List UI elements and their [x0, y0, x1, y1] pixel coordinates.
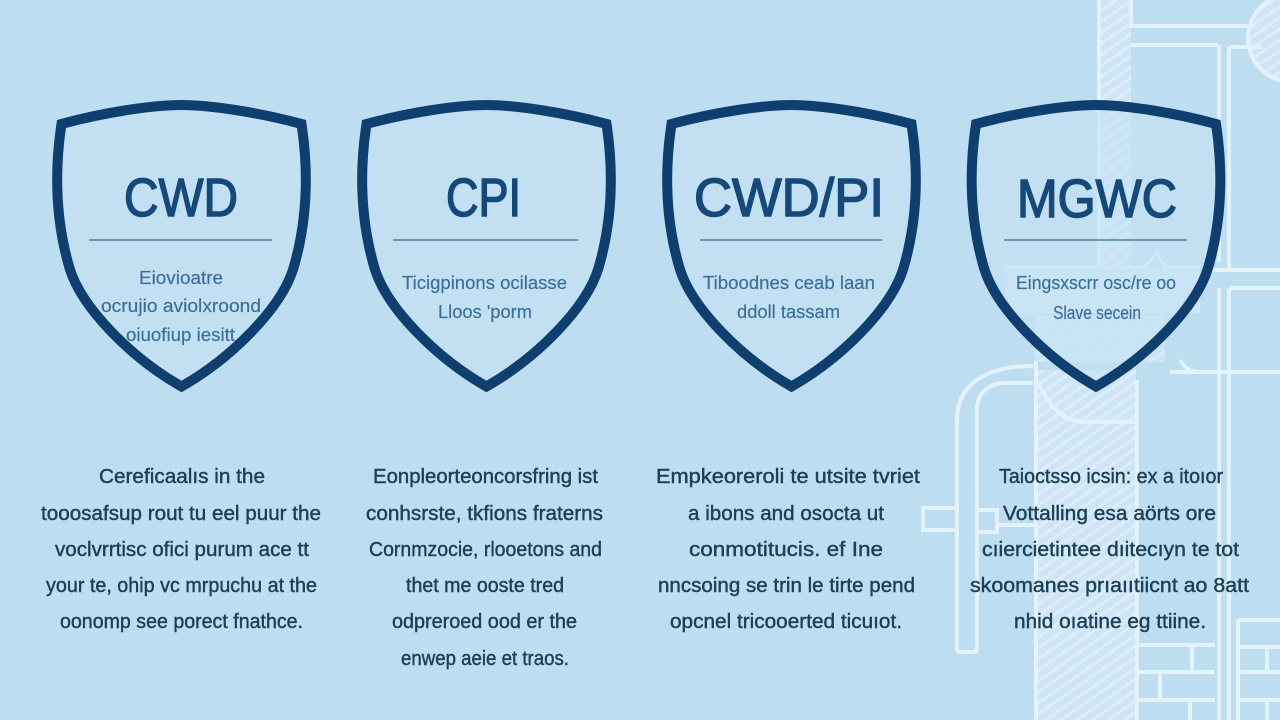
shield caption: CPI: Ticigpinons ocilasse — [402, 272, 567, 293]
shield: CWD/PI — [667, 105, 916, 386]
shield caption: CWD/PI: ddoll tassam — [737, 301, 840, 322]
blueprint pipe illustration — [923, 0, 1280, 720]
text block: column 4: cıiercietintee dıitecıyn te tot — [982, 539, 1239, 561]
text block: column 2: thet me ooste tred — [406, 575, 564, 597]
shield caption: CWD/PI — [703, 272, 875, 322]
shield caption: MGWC — [1016, 272, 1176, 323]
text block: column 3 — [656, 466, 920, 633]
shield: MGWC — [972, 105, 1220, 386]
text block: column 4: Vottalling esa aörts ore — [1003, 503, 1216, 525]
title: CWD/PI: CWD/PI — [694, 168, 884, 228]
text block: column 3: opcnel tricooerted ticuıot. — [670, 611, 902, 633]
title: MGWC: MGWC — [1017, 169, 1177, 229]
text block: column 1: oonomp see porect fnathce. — [60, 611, 303, 633]
text block: column 1: Cereficaalıs in the — [99, 466, 265, 488]
text block: column 3: Empkeoreroli te utsite tvriet — [656, 466, 920, 488]
shield caption: MGWC: Slave secein — [1053, 302, 1141, 323]
shield: CWD — [57, 105, 306, 386]
shield caption: MGWC: Eingsxscrr osc/re oo — [1016, 272, 1176, 293]
text block: column 3: a ibons and osocta ut — [688, 503, 884, 525]
shield caption: CWD — [101, 267, 261, 345]
text block: column 4 — [970, 466, 1249, 633]
text block: column 2: odpreroed ood er the — [392, 611, 577, 633]
text block: column 3: conmotitucis. ef Ine — [689, 539, 883, 561]
text block: column 2: Cornmzocie, rlooetons and — [369, 539, 602, 561]
title: CWD: CWD — [124, 168, 238, 228]
title: CPI: CPI — [446, 168, 521, 228]
text block: column 4: nhid oıatine eg ttiine. — [1014, 611, 1206, 633]
shield caption: CWD/PI: Tiboodnes ceab laan — [703, 272, 875, 293]
shield caption: CWD: ocrujio aviolxroond — [101, 295, 261, 316]
shield caption: CPI: Lloos 'porm — [438, 301, 532, 322]
shield caption: CPI — [402, 272, 567, 322]
shield caption: CWD: oiuofiup iesitt — [126, 324, 235, 345]
text block: column 3: nncsoing se trin le tirte pend — [658, 575, 915, 597]
text block: column 4: skoomanes prıaııtiicnt ao 8att — [970, 575, 1249, 597]
text block: column 2: enwep aeie et traos. — [401, 648, 569, 670]
shield: CPI — [362, 105, 611, 386]
text block: column 1: tooosafsup rout tu eel puur the — [41, 503, 321, 525]
shield caption: CWD: Eiovioatre — [139, 267, 223, 288]
text block: column 1 — [41, 466, 321, 633]
text block: column 1: your te, ohip vc mrpuchu at the — [46, 575, 317, 597]
text block: column 2: conhsrste, tkfions fraterns — [366, 503, 603, 525]
text block: column 2: Eonpleorteoncorsfring ist — [373, 466, 598, 488]
text block: column 2 — [366, 466, 603, 670]
text block: column 1: voclvrrtisc ofici purum ace tt — [55, 539, 309, 561]
text block: column 4: Taioctsso icsin: ex a itoıor — [999, 466, 1223, 488]
